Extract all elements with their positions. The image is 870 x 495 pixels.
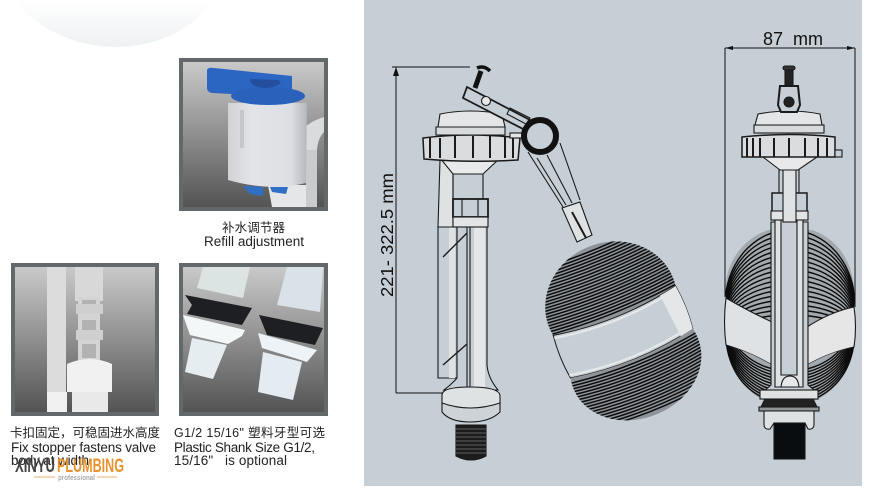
side valve lower tube: [438, 227, 498, 390]
front base and thread: [759, 390, 819, 459]
ball middle band: [552, 285, 697, 385]
width dimension: 87 mm: [763, 29, 823, 49]
caption: fix stopper: Fix stopper fastens valve: [11, 440, 156, 455]
logo: Xinyu Plumbing: [15, 456, 124, 482]
caption: refill adjustment: [204, 220, 304, 249]
caption: refill adjustment: 补水调节器: [222, 220, 285, 235]
caption: plastic shank: [174, 425, 325, 468]
height dimension: [377, 67, 470, 393]
caption: fix stopper: 卡扣固定，可稳固进水高度: [10, 425, 160, 440]
side valve base and thread: [442, 387, 500, 460]
float rod: [528, 143, 592, 242]
drawing: front view valve: [720, 66, 860, 459]
front adjuster and screw: [778, 66, 800, 112]
decorative white ball at top: [15, 0, 212, 47]
side valve ring: [524, 120, 556, 152]
front cap: [742, 111, 842, 170]
caption: fix stopper: body at width: [11, 453, 89, 468]
ball lower ribbed dome: [570, 328, 702, 420]
photo: plastic shank: [181, 265, 326, 414]
panel: technical drawing background: [364, 0, 862, 486]
ball upper ribbed dome: [545, 241, 676, 335]
width dimension: [725, 29, 855, 307]
photo: fix stopper: [13, 265, 157, 414]
caption: refill adjustment: Refill adjustment: [204, 234, 304, 249]
front stem and blocks: [771, 157, 808, 222]
logo: Xinyu Plumbing: PLUMBING: [57, 456, 124, 477]
logo: Xinyu Plumbing: professional: [58, 475, 95, 482]
logo: Xinyu Plumbing: XINYU: [15, 456, 55, 477]
height dimension: 221- 322.5 mm: [377, 173, 397, 297]
caption: fix stopper: [10, 425, 160, 468]
side valve stem and block: [438, 160, 488, 227]
caption: plastic shank: Plastic Shank Size G1/2,: [174, 440, 315, 455]
side valve adjuster arm and screw: [463, 67, 530, 138]
front tube: [765, 220, 814, 390]
side valve cap: [423, 111, 520, 174]
drawing: side view valve: [423, 67, 731, 460]
photo: refill adjustment: [181, 60, 326, 209]
caption: plastic shank: 15/16" is optional: [174, 453, 287, 468]
caption: plastic shank: G1/2 15/16" 塑料牙型可选: [174, 425, 325, 440]
front ball upper ribbed dome: [726, 230, 854, 326]
float ball, side view: [545, 241, 702, 420]
front ball lower ribbed dome: [726, 345, 854, 401]
front ball band: [724, 298, 856, 365]
